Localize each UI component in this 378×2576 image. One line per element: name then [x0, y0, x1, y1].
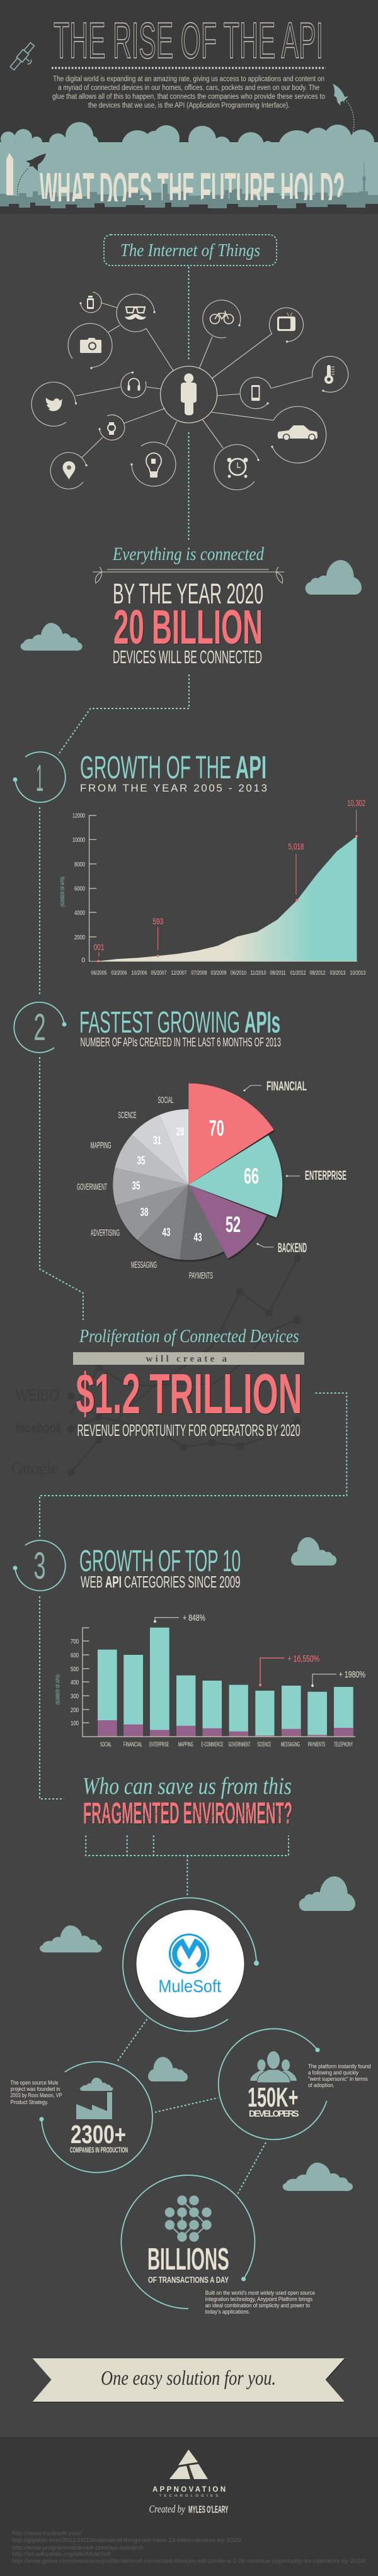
- description: today's applications.: [205, 2309, 250, 2316]
- 20 billion: 20 BILLION: [113, 600, 263, 654]
- cracks: [88, 1805, 284, 1822]
- banner: one easy solution: [33, 2358, 345, 2402]
- cloud near mulesoft left: [40, 1925, 102, 1952]
- y axis labels: 600: [71, 1652, 79, 1659]
- major labels: BACKEND: [278, 1241, 307, 1255]
- slice values: 35: [137, 1154, 145, 1167]
- panel: header: [0, 0, 378, 218]
- slice values: 43: [194, 1231, 202, 1243]
- leader lines: [243, 1085, 300, 1247]
- number badge 2: 2: [34, 1006, 45, 1048]
- description: [10, 2080, 62, 2106]
- stat label: DEVELOPERS: [249, 2109, 299, 2119]
- y axis labels: 0: [81, 957, 85, 964]
- ring: [219, 2029, 327, 2139]
- node: glasses: [117, 294, 156, 332]
- pie chart: PAYMENTS: [189, 1270, 213, 1281]
- number badge 1: 1: [36, 757, 43, 799]
- node: tv: [269, 308, 303, 343]
- x axis labels: 10/2006: [131, 970, 147, 977]
- node: camera: [68, 323, 112, 369]
- x axis labels: [100, 1742, 353, 1748]
- ring: [121, 2175, 255, 2309]
- company sub name: TECHNOLOGIES: [159, 2494, 218, 2498]
- icon: satellite: [9, 42, 40, 75]
- ring: [42, 2062, 152, 2173]
- y axis title: (NUMBER OF APIS): [60, 876, 66, 907]
- description: "went supersonic" in terms: [308, 2076, 368, 2083]
- area chart: [60, 798, 365, 977]
- cloud lower right: [283, 2163, 353, 2191]
- intro text: [52, 76, 325, 109]
- y axis labels: 300: [71, 1693, 79, 1700]
- heading box: [104, 235, 277, 266]
- slice values: 43: [163, 1226, 170, 1238]
- faint brand labels: facebook: [16, 1420, 62, 1436]
- y axis labels: [72, 813, 85, 964]
- tower left: [6, 153, 13, 195]
- x axis labels: 06/2005: [91, 970, 107, 977]
- x axis labels: GOVERNMENT: [228, 1742, 251, 1748]
- subheading: API: [105, 1572, 122, 1591]
- faint brand labels: WEIBO: [16, 1386, 59, 1404]
- slice: backend: [188, 1185, 266, 1258]
- stat label: COMPANIES IN PRODUCTION: [70, 2146, 128, 2154]
- callout +16,550%: + 16,550%: [288, 1654, 319, 1664]
- major labels: [266, 1079, 346, 1255]
- y axis labels: 12000: [72, 813, 85, 819]
- source links: http://www.gsma.com/newsroom/proliferation-of-connected-devices-will-create-a-1-2tr-revenue-opportunity-for-operators-by-2020/: [12, 2558, 366, 2565]
- y axis labels: 10000: [72, 837, 85, 844]
- node: car: [271, 406, 326, 463]
- node: phone: [240, 378, 271, 409]
- description: an ideal combination of simplicity and power to: [205, 2302, 310, 2309]
- x axis labels: 12/2007: [171, 970, 186, 977]
- faint brand labels: Google: [11, 1459, 58, 1477]
- y axis labels: 500: [71, 1666, 79, 1673]
- x axis labels: 05/2007: [151, 970, 166, 977]
- icon: light rocket with trail: [333, 84, 354, 133]
- heading: FASTEST GROWING: [79, 1006, 240, 1039]
- cloud near mulesoft right: [299, 1876, 355, 1911]
- section 1: growth of the api: [13, 749, 365, 977]
- ring: [123, 1898, 256, 2031]
- x axis labels: SCIENCE: [257, 1742, 272, 1748]
- number badge 3: [13, 1540, 66, 1591]
- ornament: [93, 567, 284, 583]
- slice names: [77, 1095, 213, 1281]
- by the year text: BY THE YEAR 2020: [113, 578, 263, 610]
- description: a following and quickly: [308, 2069, 358, 2076]
- subheading: CATEGORIES SINCE 2009: [124, 1572, 241, 1591]
- cloud middle: [148, 2057, 188, 2081]
- intro text: The digital world is expanding at an amazing rate, giving us access to applications and content on: [53, 76, 324, 83]
- description: Product Strategy.: [10, 2099, 48, 2106]
- subheading: [81, 1572, 241, 1591]
- callout +1980%: + 1980%: [339, 1669, 365, 1680]
- description: Built on the world's most widely used open source: [205, 2290, 315, 2297]
- source links: http://gigaom.com/2011/10/13/internet-of-things-will-have-24-billion-devices-by-2020/: [12, 2537, 242, 2544]
- bar chart: TELEPHONY: [334, 1742, 353, 1748]
- subheading: WEB: [81, 1572, 103, 1591]
- panel: footer: MYLES O'LEARY: [188, 2504, 229, 2516]
- source links: http://www.programmableweb.com/api-research: [12, 2545, 144, 2551]
- y axis labels: 4000: [74, 910, 85, 917]
- slice names: MESSAGING: [131, 1260, 157, 1270]
- x axis labels: 03/2009: [210, 970, 227, 977]
- faint background network: [67, 1255, 301, 1476]
- source links: http://www.mulesoft.com/: [12, 2530, 82, 2537]
- bar: [73, 1352, 304, 1365]
- skyline front mid buildings: [0, 184, 378, 214]
- credit: Created by: [149, 2503, 185, 2515]
- script heading: Proliferation of Connected Devices: [79, 1326, 299, 1347]
- heading box: The Internet of Things: [120, 240, 260, 260]
- data callouts: 001: [93, 942, 105, 952]
- y axis labels: 2000: [74, 934, 85, 941]
- y axis title: (NUMBER OF APIS): [55, 1674, 60, 1705]
- slice names: SCIENCE: [118, 1110, 136, 1121]
- axes: [89, 815, 357, 961]
- panel: fragmented environment question: [83, 1773, 292, 1830]
- y axis labels: 8000: [74, 861, 85, 868]
- node: twitter: [32, 382, 77, 426]
- connector to section 1: [58, 675, 189, 755]
- slice values: 66: [244, 1164, 259, 1189]
- company name: APPNOVATION: [152, 2486, 226, 2494]
- heading: GROWTH OF TOP 10: [79, 1545, 241, 1578]
- connector section 2 to callout: [40, 1057, 83, 1320]
- slice values: 52: [226, 1212, 241, 1237]
- slice values: 70: [209, 1116, 224, 1141]
- data callouts: 10,302: [347, 798, 365, 808]
- callout +1980%: [311, 1669, 365, 1687]
- slice: enterprise: [188, 1135, 282, 1218]
- pie chart: [77, 1079, 346, 1281]
- intro text: glue that allows all of this to happen, that connects the companies who provide these services to: [52, 93, 325, 101]
- panel: mulesoft logo: [123, 1898, 259, 2031]
- icon: node grid: [165, 2195, 212, 2242]
- slice values: [132, 1116, 259, 1243]
- x axis labels: [91, 970, 365, 977]
- connector callout to section 3: [40, 1393, 346, 1537]
- slice values: 28: [176, 1125, 184, 1138]
- heading: [79, 1006, 280, 1039]
- faint brand labels: [11, 1386, 62, 1477]
- slice values: 35: [132, 1179, 140, 1192]
- bar chart: [55, 1613, 365, 1748]
- x axis labels: 08/2011: [270, 970, 286, 977]
- clouds band: [0, 122, 378, 214]
- heading script: Everything is connected: [112, 544, 265, 564]
- description: The open source Mule: [10, 2080, 58, 2086]
- x axis labels: 01/2012: [290, 970, 306, 977]
- panel: developers stat: [219, 2029, 371, 2139]
- connector dashes: [188, 267, 189, 541]
- data callouts: 5,018: [289, 841, 304, 851]
- y axis labels: 200: [71, 1706, 79, 1714]
- node: bicycle: [203, 300, 241, 338]
- banner: one easy solution: One easy solution for you.: [101, 2367, 276, 2390]
- credit: [149, 2503, 229, 2516]
- skyline front dark layer: [0, 203, 378, 214]
- callout +848%: + 848%: [183, 1613, 205, 1623]
- x axis labels: 06/2010: [231, 970, 246, 977]
- stat number: 150K+: [248, 2082, 298, 2113]
- slice names: GOVERNMENT: [77, 1182, 107, 1192]
- node: headphones: [121, 371, 146, 398]
- y axis labels: 100: [71, 1720, 79, 1727]
- intro text: the devices that we use, is the API (Application Programming Interface).: [88, 102, 290, 109]
- panel: everything is connected: [93, 544, 284, 668]
- x axis labels: 08/2012: [310, 970, 325, 977]
- white disc: [136, 1910, 244, 2018]
- y axis labels: 700: [71, 1638, 79, 1645]
- axes: [83, 1628, 355, 1737]
- section 2: fastest growing apis: [11, 1002, 346, 1477]
- stat number: 2300+: [71, 2120, 126, 2149]
- node: pill bottle: [79, 292, 101, 313]
- node: thermometer: [312, 356, 348, 392]
- node: location pin: [50, 452, 88, 489]
- source links: http://en.wikipedia.org/wiki/MuleSoft: [12, 2551, 111, 2558]
- node: clock: [214, 445, 260, 490]
- x axis labels: FINANCIAL: [123, 1742, 142, 1748]
- y axis labels: 6000: [74, 886, 85, 892]
- slice names: MAPPING: [91, 1140, 111, 1151]
- x axis labels: 03/2006: [111, 970, 127, 977]
- bracket connector: [86, 1835, 289, 1897]
- skyline back layer: [0, 189, 378, 214]
- central person: [161, 366, 217, 423]
- x axis labels: 10/2013: [350, 970, 365, 977]
- x axis labels: PAYMENTS: [308, 1742, 325, 1748]
- cloud section 3: [291, 1537, 336, 1565]
- slice values: 31: [153, 1134, 161, 1146]
- x axis labels: 11/2010: [251, 970, 266, 977]
- data callouts: 593: [152, 916, 163, 926]
- script heading: Who can save us from this: [83, 1773, 292, 1800]
- number badge 1: [13, 752, 66, 802]
- panel: footer: [0, 2437, 378, 2576]
- number badge 3: 3: [34, 1545, 45, 1587]
- wordmark: MuleSoft: [158, 1976, 221, 1996]
- description: [205, 2290, 315, 2316]
- panel: internet of things: [32, 235, 348, 541]
- description: project was founded in: [10, 2086, 60, 2093]
- x axis labels: ENTERPRISE: [149, 1742, 169, 1748]
- x axis labels: 07/2008: [192, 970, 207, 977]
- x axis labels: MAPPING: [178, 1742, 193, 1748]
- panel: trillion callout: [73, 1326, 304, 1440]
- intro text: a myriad of connected devices in our homes, offices, cars, pockets and even on our body. The: [58, 84, 319, 92]
- slice names: SOCIAL: [158, 1095, 174, 1106]
- slice names: ADVERTISING: [91, 1228, 120, 1238]
- y axis labels: 400: [71, 1679, 79, 1686]
- bars: [98, 1628, 353, 1737]
- major labels: FINANCIAL: [266, 1079, 307, 1094]
- callout +16,550%: [259, 1654, 319, 1686]
- heading: [80, 749, 266, 785]
- section 3: growth of top 10: [13, 1540, 365, 1748]
- node: watch: [98, 415, 125, 440]
- heading: APIs: [244, 1006, 280, 1039]
- cloud left: [21, 623, 83, 651]
- logo mark: [169, 2450, 208, 2479]
- description: [308, 2063, 371, 2089]
- source links: [12, 2530, 366, 2565]
- panel: billions stat: [121, 2175, 315, 2316]
- x axis labels: 03/2013: [330, 970, 345, 977]
- icon: factory: [76, 2078, 113, 2119]
- slice: financial: [188, 1084, 274, 1185]
- connector section 3 to question: [40, 1596, 64, 1799]
- stat number: BILLIONS: [147, 2243, 229, 2276]
- x axis labels: MESSAGING: [281, 1742, 300, 1748]
- panel: companies stat: [10, 2062, 152, 2173]
- description: of adoption.: [308, 2082, 335, 2089]
- logo mark: [170, 1934, 208, 1973]
- icon: people: [250, 2051, 297, 2083]
- x axis labels: E-COMMERCE: [202, 1742, 224, 1748]
- bar: will create a: [146, 1354, 227, 1364]
- x axis labels: SOCIAL: [100, 1742, 112, 1748]
- connectors between stats: [117, 2019, 266, 2194]
- description: 2003 by Ross Mason, VP: [10, 2092, 62, 2099]
- cloud right: [306, 560, 362, 595]
- tower right: [362, 162, 366, 196]
- slice values: 38: [140, 1206, 149, 1218]
- subheading: FROM THE YEAR 2005 - 2013: [80, 782, 267, 794]
- stat label: OF TRANSACTIONS A DAY: [148, 2275, 229, 2285]
- heading: API: [236, 749, 266, 785]
- connector lines: [76, 303, 312, 457]
- description: integration technology, Anypoint Platform brings: [205, 2296, 312, 2303]
- grey slices: [113, 1109, 224, 1260]
- number badge 2: [14, 1002, 66, 1053]
- data callouts: [93, 798, 365, 963]
- callout +848%: [154, 1613, 205, 1623]
- icon: dark rocket with trail: [18, 154, 46, 196]
- node: light bulb: [130, 442, 176, 486]
- connector section 1 to 2: [39, 807, 40, 996]
- y axis labels: [71, 1638, 79, 1727]
- heading: GROWTH OF THE: [80, 749, 231, 785]
- dotted divider: [52, 67, 326, 69]
